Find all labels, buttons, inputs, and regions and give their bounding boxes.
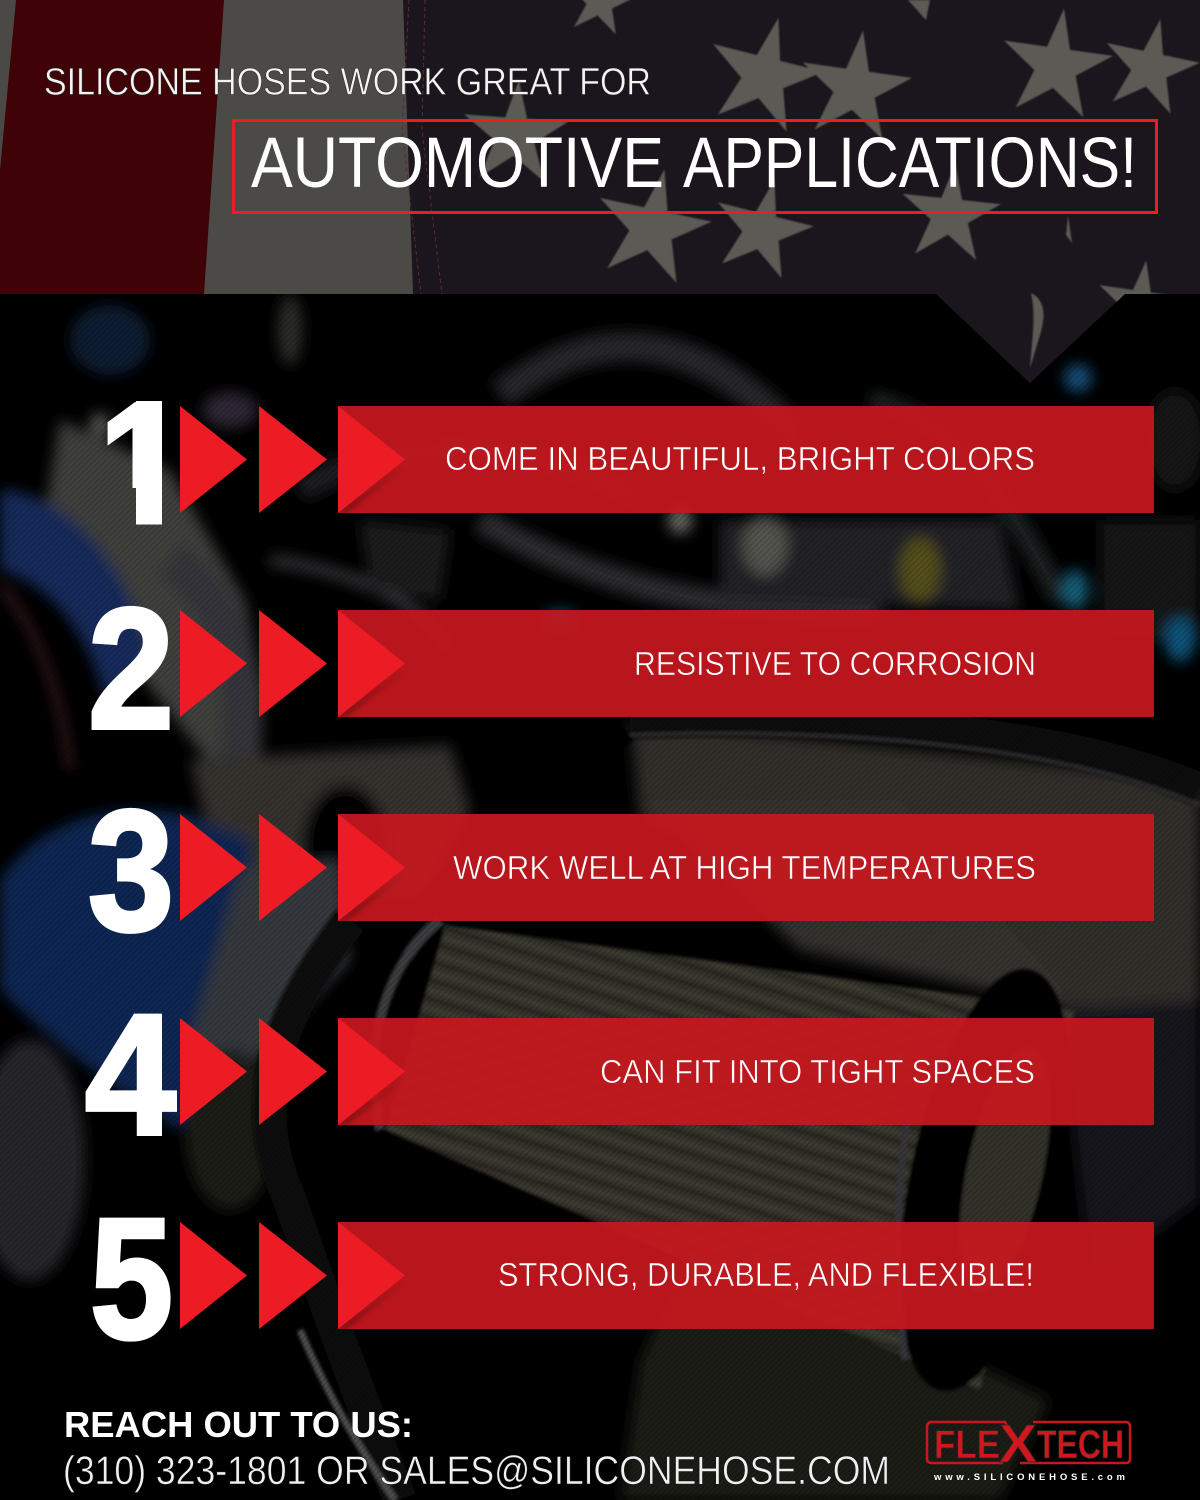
filter end cap (867, 954, 1103, 1406)
logo: Flextech: www.SILICONEHOSE.com (933, 1472, 1125, 1483)
number 3: 3 (88, 775, 174, 967)
item 3 (88, 775, 1154, 967)
bar 4 (338, 1018, 1154, 1125)
bar 2: RESISTIVE TO CORROSION (634, 645, 1036, 682)
bar 1 (338, 406, 1154, 513)
title box: AUTOMOTIVE (251, 124, 664, 203)
bar 3 (338, 814, 1154, 921)
mid components (720, 520, 1020, 610)
arrows 5 (180, 1222, 327, 1329)
filter base ring (374, 920, 440, 1130)
arrows 4 (180, 1018, 327, 1125)
lower right brown (620, 1230, 1050, 1500)
number 1 (108, 401, 162, 524)
logo: Flextech: X (999, 1414, 1037, 1474)
logo: Flextech: TECH (1037, 1423, 1124, 1467)
item 1 (108, 401, 1154, 524)
throttle body area (190, 745, 470, 900)
blue hose left (0, 490, 150, 700)
title box: APPLICATIONS! (683, 124, 1137, 203)
bar 2 (338, 610, 1154, 717)
bar 4: CAN FIT INTO TIGHT SPACES (600, 1053, 1035, 1090)
arrows 2 (180, 610, 327, 717)
number 5: 5 (90, 1183, 173, 1375)
diagonal hoses near filter (400, 725, 620, 950)
left engine block upper (40, 420, 265, 770)
item 2 (88, 573, 1154, 765)
air filter cone (385, 925, 1075, 1390)
subtitle: SILICONE HOSES WORK GREAT FOR (44, 62, 651, 104)
item 4 (85, 979, 1154, 1171)
number 4: 4 (85, 979, 176, 1171)
arrows 1 (180, 406, 327, 513)
stars on flag (460, 0, 1200, 368)
logo: Flextech: FLE (934, 1423, 1000, 1467)
bar 5: STRONG, DURABLE, AND FLEXIBLE! (498, 1256, 1034, 1293)
contact details: (310) 323-1801 OR SALES@SILICONEHOSE.COM (63, 1449, 890, 1493)
logo: Flextech (927, 1414, 1130, 1483)
stitching (402, 0, 442, 294)
bar 1: COME IN BEAUTIFUL, BRIGHT COLORS (445, 440, 1035, 477)
bar 5 (338, 1222, 1154, 1329)
red stripe (0, 0, 224, 294)
number 1: 1 (99, 368, 183, 560)
bar 3: WORK WELL AT HIGH TEMPERATURES (453, 849, 1036, 886)
grey panel (630, 720, 1200, 1010)
white stripe (204, 0, 413, 294)
arrows 3 (180, 814, 327, 921)
flag header background (0, 0, 1200, 390)
number 2: 2 (88, 573, 174, 765)
blue intake (0, 810, 250, 1130)
big hose across panel (630, 720, 1200, 790)
black hoses upper (500, 347, 800, 440)
blue field (403, 0, 1200, 383)
item 5 (90, 1183, 1154, 1375)
title box (234, 120, 1156, 212)
contact heading: REACH OUT TO US: (64, 1404, 413, 1445)
